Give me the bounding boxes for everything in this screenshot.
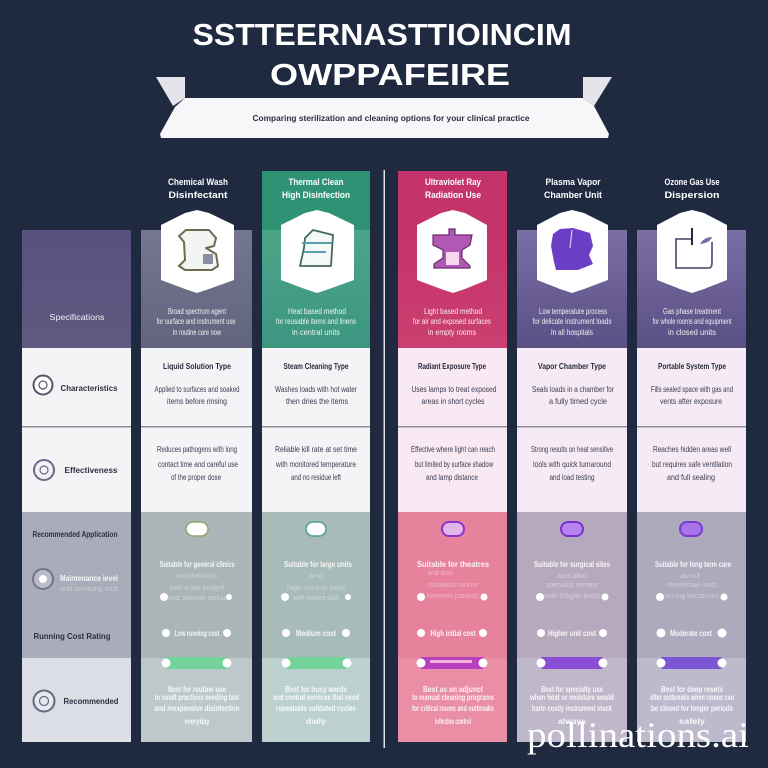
row 2 text: Reduces pathogens with long [157, 445, 237, 454]
panel: column 3 pink highlighted [398, 171, 507, 742]
bottom text: Best for routine use [168, 685, 226, 694]
bottom text: Best for deep resets [661, 685, 723, 694]
row 1 text: Seals loads in a chamber for [532, 385, 614, 394]
rating text [417, 560, 490, 601]
column heading [425, 177, 481, 200]
progress bar [162, 657, 232, 669]
row 2 text [157, 445, 238, 482]
column heading [544, 177, 602, 200]
panel: column 4 purple [517, 177, 627, 742]
row 2 text [411, 445, 495, 482]
row 1 text [412, 362, 496, 406]
column heading: Chamber Unit [544, 190, 602, 200]
row 2 text: with monitored temperature [275, 460, 356, 469]
rating text [655, 560, 731, 601]
column description: for whole rooms and equipment [652, 317, 732, 326]
bottom text: infection control [435, 717, 471, 726]
row 1 text: vents after exposure [660, 397, 722, 406]
bottom text: Best for specialty use [541, 685, 603, 694]
bottom text: Best for busy wards [285, 685, 347, 694]
bottom text: Best as an adjunct [423, 685, 483, 694]
progress bar [536, 657, 608, 669]
bottom text [650, 685, 734, 726]
column heading: Ozone Gas Use [664, 177, 720, 187]
pill indicator [306, 522, 326, 536]
column description [156, 307, 236, 337]
hexagon icon [161, 210, 234, 293]
row 1 text: a fully timed cycle [549, 397, 607, 406]
row 1 text: items before rinsing [167, 397, 227, 406]
rating text: and [680, 573, 700, 580]
column heading: Ultraviolet Ray [425, 177, 481, 187]
bottom text: and inexpensive disinfection [154, 704, 240, 713]
rating text [534, 560, 610, 601]
panel: bottom row label: Recommended [64, 697, 119, 706]
title: SSTTEERNASTTIOINCIM [192, 17, 572, 52]
rating text: between patients [427, 593, 479, 600]
row 2 text: and lamp distance [426, 473, 478, 482]
ribbon banner with subtitle [156, 77, 612, 138]
panel: row 2 label: Effectiveness [64, 466, 118, 475]
bottom text: in small practices needing fast [155, 693, 239, 702]
rating text: specialist centers [546, 582, 598, 589]
column description [413, 307, 491, 337]
row 2 text: and full sealing [667, 473, 715, 482]
progress bar [656, 657, 726, 669]
rating text: Suitable for large units [284, 560, 352, 569]
column description: Gas phase treatment [663, 307, 722, 316]
rating text: Suitable for theatres [417, 560, 490, 569]
bottom text: repeatable validated cycles [276, 704, 356, 713]
row 1 text: Fills sealed space with gas and [651, 385, 733, 394]
rating text: and small wards [177, 573, 217, 580]
column description: for surface and instrument use [156, 317, 236, 326]
pill indicator [680, 522, 702, 536]
column description: Low temperature process [539, 307, 607, 316]
center divider [384, 170, 385, 748]
bottom text: always [558, 717, 587, 726]
row labels column [22, 230, 131, 742]
panel: bottom row label [22, 658, 131, 742]
rating text: and [309, 573, 323, 580]
row 1 text [651, 362, 733, 406]
bottom text: and central services that need [273, 693, 359, 702]
column description: Heat based method [288, 307, 346, 316]
cost rating: Higher unit cost [548, 629, 596, 638]
panel: row 1 label [22, 348, 131, 426]
panel: gray row labels: Recommended Application [32, 530, 118, 539]
cost rating: Medium cost [296, 629, 336, 638]
rating text: with fragile tools [543, 593, 601, 600]
panel: row 2 label [22, 427, 131, 512]
row 1 text: Uses lamps to treat exposed [412, 385, 496, 394]
column description: in routine care now [173, 328, 221, 337]
row 1 text [532, 362, 614, 406]
rating text [281, 560, 352, 602]
column description: for delicate instrument loads [532, 317, 612, 326]
row 2 text [275, 445, 357, 482]
column heading: Plasma Vapor [546, 177, 601, 187]
rating text: high volume sites [287, 585, 346, 592]
column heading: Chemical Wash [168, 177, 228, 187]
cost rating: High initial cost [430, 629, 476, 638]
watermark: pollinations.ai [527, 715, 749, 755]
row 2 text: tools with quick turnaround [533, 460, 611, 469]
rating text: with trained staff [293, 595, 339, 602]
column description: for reusable items and linens [276, 317, 356, 326]
row 1 text: Steam Cleaning Type [284, 362, 349, 371]
row 2 text: Strong results on heat sensitive [531, 445, 613, 454]
column heading: Dispersion [664, 190, 720, 200]
column heading: Radiation Use [425, 190, 481, 200]
bottom text [412, 685, 494, 726]
column description [652, 307, 732, 337]
progress bar [416, 657, 488, 669]
hexagon icon [417, 210, 487, 293]
column description: in empty rooms [428, 328, 476, 337]
row 2 text: Reliable kill rate at set time [275, 445, 357, 454]
rating text: isolation rooms [428, 582, 479, 589]
rating text: and also [557, 573, 587, 580]
row 1 text: Portable System Type [658, 362, 726, 371]
pill indicator [186, 522, 208, 536]
row 2 text: but limited by surface shadow [415, 460, 493, 469]
row 2 text [531, 445, 613, 482]
row 1 text: Radiant Exposure Type [418, 362, 486, 371]
panel: gray row labels [22, 512, 131, 658]
rating text: residential units [667, 582, 718, 589]
hexagon icon [537, 210, 608, 293]
panel: gray row labels: and servicing cost [60, 586, 118, 593]
subtitle: Comparing sterilization and cleaning options for your clinical practice [252, 114, 530, 123]
title [192, 17, 572, 92]
hexagon icon [657, 210, 727, 293]
row 1 text: Vapor Chamber Type [538, 362, 606, 371]
row 1 text: areas in short cycles [422, 397, 484, 406]
row 1 text [154, 362, 240, 406]
bottom text: everyday [184, 717, 210, 726]
cost rating: Low running cost [174, 629, 220, 638]
bottom text [154, 685, 240, 726]
column heading: Disinfectant [168, 190, 228, 200]
rating text: Suitable for long term care [655, 560, 731, 569]
column description: for air and exposed surfaces [413, 317, 491, 326]
rating text: Suitable for general clinics [160, 560, 235, 569]
bottom text: safely [679, 717, 706, 726]
row 2 text: Effective where light can reach [411, 445, 495, 454]
row 2 text: and no residue left [291, 473, 342, 482]
column description [532, 307, 612, 337]
hexagon icon [281, 210, 354, 293]
row 1 text: Washes loads with hot water [275, 385, 357, 394]
row 1 text: Liquid Solution Type [163, 362, 231, 371]
row 2 text: Reaches hidden areas well [653, 445, 731, 454]
row 2 text: and load testing [550, 473, 594, 482]
rating text: Suitable for surgical sites [534, 560, 610, 569]
pill indicator [442, 522, 464, 536]
rating text: and simple setup [166, 595, 228, 602]
column heading [282, 177, 350, 200]
title: OWPPAFEIRE [270, 57, 510, 92]
column description: Broad spectrum agent [168, 307, 227, 316]
panel: column 1 gray [141, 177, 252, 742]
cost rating: Moderate cost [670, 629, 712, 638]
column heading [664, 177, 720, 200]
column description [276, 307, 356, 337]
bottom text: for critical rooms and outbreaks [412, 704, 494, 713]
bottom text: harm costly instrument stock [532, 704, 612, 713]
panel: gray row labels: Running Cost Rating [34, 632, 111, 641]
bottom text [529, 685, 614, 726]
panel: column 2 green highlighted [262, 171, 370, 742]
bottom text [273, 685, 359, 726]
row 2 text: contact time and careful use [158, 460, 238, 469]
rating text: and also [428, 570, 453, 577]
column description: Light based method [424, 307, 482, 316]
bottom text: to manual cleaning programs [412, 693, 494, 702]
panel: column 5 purple [637, 177, 746, 742]
row 1 text [275, 362, 357, 406]
column heading: Thermal Clean [288, 177, 344, 187]
row labels column: Specifications [50, 313, 104, 322]
row 2 text: of the proper dose [171, 473, 221, 482]
rating text [160, 560, 235, 602]
row separator lines [22, 426, 746, 428]
row 2 text [652, 445, 732, 482]
bottom text: when heat or moisture would [529, 693, 614, 702]
row 1 text: then dries the items [286, 397, 348, 406]
column description: in central units [292, 328, 340, 337]
panel: row 1 label: Characteristics [60, 384, 118, 393]
bottom text: daily [306, 717, 327, 726]
column heading: High Disinfection [282, 190, 350, 200]
pill indicator [561, 522, 583, 536]
bottom text: be closed for longer periods [651, 704, 733, 713]
panel: label header [22, 230, 131, 348]
column description: in closed units [668, 328, 716, 337]
row 2 text: but requires safe ventilation [652, 460, 732, 469]
panel: gray row labels: Maintenance level [60, 574, 118, 583]
row 1 text: Applied to surfaces and soaked [154, 385, 240, 394]
rating text: during vacancies [665, 593, 720, 600]
column description: in all hospitals [551, 328, 593, 337]
column heading [168, 177, 228, 200]
rating text: with a low budget [168, 585, 225, 592]
progress bar [282, 657, 352, 669]
